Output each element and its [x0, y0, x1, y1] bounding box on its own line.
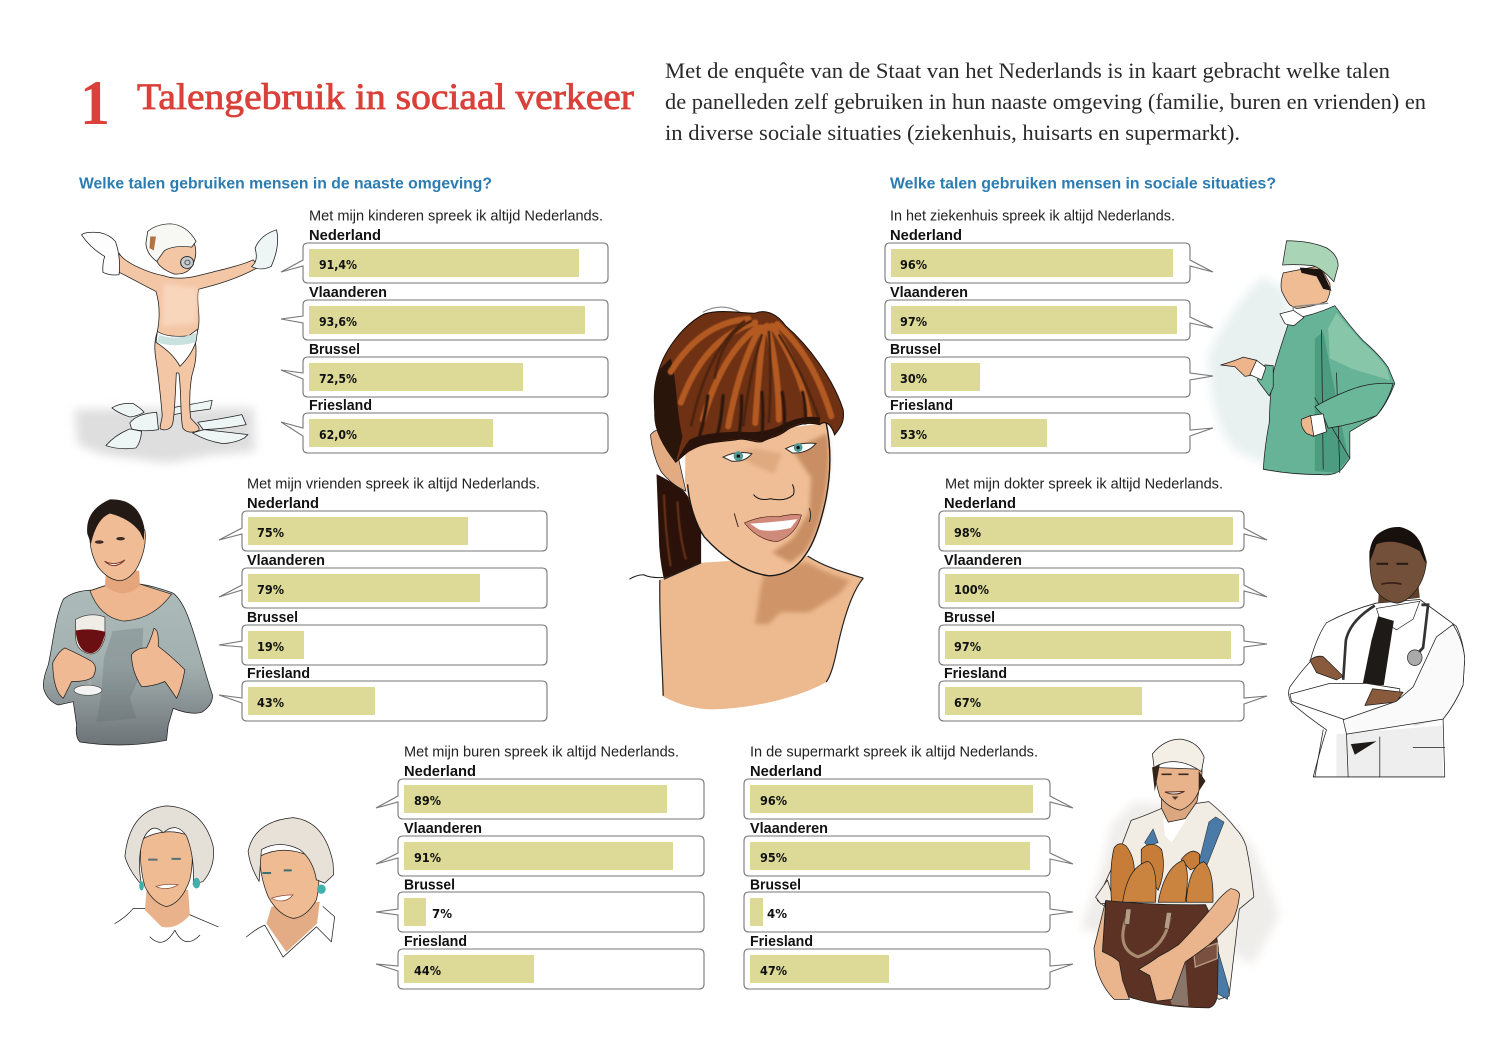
illustration: young woman with wine glass: [43, 499, 213, 745]
row: Nederland 98%: [939, 496, 1267, 551]
sentence: In de supermarkt spreek ik altijd Nederlands.: [750, 744, 1038, 760]
row: Brussel 97%: [939, 610, 1267, 665]
neighbour right: [246, 818, 335, 957]
row: Brussel 4%: 4%: [767, 907, 787, 921]
row: Friesland 43%: Friesland: [247, 666, 310, 682]
row: Friesland 53%: 53%: [900, 428, 927, 442]
row: Friesland 43%: 43%: [257, 696, 284, 710]
intro text: Met de enquête van de Staat van het Nederlands is in kaart gebracht welke talen: [665, 58, 1390, 83]
row: Nederland 75%: [219, 496, 547, 551]
row: Nederland 91,4%: 91,4%: [319, 258, 357, 272]
illustration: surgeon: [1208, 241, 1395, 475]
row: Brussel 4%: [744, 878, 1073, 932]
sentence: Met mijn kinderen spreek ik altijd Nederlands.: [309, 208, 603, 224]
row: Friesland 62,0%: 62,0%: [319, 428, 357, 442]
row: Brussel 97%: 97%: [954, 640, 981, 654]
row: Vlaanderen 100%: [939, 553, 1267, 608]
panel: ziekenhuis: [885, 208, 1213, 453]
illustration: doctor: [1289, 527, 1465, 777]
sentence: Met mijn buren spreek ik altijd Nederlands.: [404, 744, 679, 760]
row: Brussel 72,5%: [281, 342, 608, 397]
row: Vlaanderen 97%: 97%: [900, 315, 927, 329]
row: Friesland 47%: 47%: [760, 964, 787, 978]
row: Vlaanderen 95%: Vlaanderen: [750, 821, 828, 837]
row: Nederland 89%: [376, 764, 704, 819]
intro text: de panelleden zelf gebruiken in hun naaste omgeving (familie, buren en vrienden) en: [665, 89, 1426, 114]
row: Friesland 53%: [885, 398, 1213, 453]
row: Vlaanderen 97%: [885, 285, 1213, 340]
row: Brussel 7%: Brussel: [404, 878, 455, 894]
row: Friesland 43%: [219, 666, 547, 721]
row: Nederland 96%: [744, 764, 1073, 819]
row: Vlaanderen 95%: [744, 821, 1073, 876]
row: Nederland 96%: Nederland: [750, 764, 822, 780]
row: Nederland 91,4%: [281, 228, 608, 283]
row: Friesland 62,0%: [281, 398, 608, 453]
row: Vlaanderen 79%: [219, 553, 547, 608]
row: Friesland 44%: Friesland: [404, 934, 467, 950]
row: Friesland 67%: 67%: [954, 696, 981, 710]
sentence: In het ziekenhuis spreek ik altijd Nederlands.: [890, 208, 1175, 224]
row: Brussel 7%: 7%: [432, 907, 452, 921]
row: Vlaanderen 91%: Vlaanderen: [404, 821, 482, 837]
row: Nederland 98%: Nederland: [944, 496, 1016, 512]
section number: 1: [80, 67, 110, 138]
row: Nederland 96%: Nederland: [890, 228, 962, 244]
panel: vrienden: [219, 476, 547, 721]
row: Brussel 7%: [376, 878, 704, 932]
illustration: baker with bag of bread: [1080, 739, 1280, 1008]
sentence: Met mijn vrienden spreek ik altijd Nederlands.: [247, 476, 540, 492]
row: Friesland 67%: [939, 666, 1267, 721]
row: Brussel 19%: Brussel: [247, 610, 298, 626]
row: Vlaanderen 93,6%: Vlaanderen: [309, 285, 387, 301]
intro text: in diverse sociale situaties (ziekenhuis, huisarts en supermarkt).: [665, 120, 1240, 145]
row: Brussel 19%: [219, 610, 547, 665]
intro text: [665, 58, 1426, 145]
subheading: sociale situaties: Welke talen gebruiken mensen in sociale situaties?: [890, 176, 1276, 192]
heading: Talengebruik in sociaal verkeer: [137, 77, 634, 118]
row: Friesland 44%: 44%: [414, 964, 441, 978]
row: Nederland 89%: Nederland: [404, 764, 476, 780]
title: [80, 67, 634, 138]
row: Nederland 98%: 98%: [954, 526, 981, 540]
row: Nederland 91,4%: Nederland: [309, 228, 381, 244]
row: Nederland 96%: [885, 228, 1213, 283]
panel: buren: [376, 744, 704, 989]
row: Nederland 75%: Nederland: [247, 496, 319, 512]
row: Nederland 96%: 96%: [760, 794, 787, 808]
row: Brussel 30%: Brussel: [890, 342, 941, 358]
row: Nederland 75%: 75%: [257, 526, 284, 540]
panel: supermarkt: [744, 744, 1073, 989]
row: Vlaanderen 91%: [376, 821, 704, 876]
row: Friesland 53%: Friesland: [890, 398, 953, 414]
row: Brussel 30%: 30%: [900, 372, 927, 386]
illustration: central woman: [629, 307, 863, 709]
row: Brussel 72,5%: Brussel: [309, 342, 360, 358]
row: Friesland 62,0%: Friesland: [309, 398, 372, 414]
row: Vlaanderen 91%: 91%: [414, 851, 441, 865]
row: Brussel 97%: Brussel: [944, 610, 995, 626]
row: Friesland 67%: Friesland: [944, 666, 1007, 682]
row: Vlaanderen 97%: Vlaanderen: [890, 285, 968, 301]
panel: dokter: [939, 476, 1267, 721]
row: Nederland 96%: 96%: [900, 258, 927, 272]
row: Brussel 19%: 19%: [257, 640, 284, 654]
row: Brussel 72,5%: 72,5%: [319, 372, 357, 386]
row: Vlaanderen 95%: 95%: [760, 851, 787, 865]
row: Vlaanderen 93,6%: 93,6%: [319, 315, 357, 329]
row: Vlaanderen 93,6%: [281, 285, 608, 340]
row: Vlaanderen 79%: Vlaanderen: [247, 553, 325, 569]
row: Vlaanderen 100%: 100%: [954, 583, 989, 597]
sentence: Met mijn dokter spreek ik altijd Nederlands.: [945, 476, 1223, 492]
row: Nederland 89%: 89%: [414, 794, 441, 808]
illustration: two elderly neighbours: [115, 806, 335, 957]
illustration: baby with diapers: [74, 224, 278, 463]
panel: kinderen: [281, 208, 608, 453]
row: Vlaanderen 100%: Vlaanderen: [944, 553, 1022, 569]
row: Brussel 30%: [885, 342, 1213, 397]
row: Friesland 47%: [744, 934, 1073, 989]
row: Friesland 44%: [376, 934, 704, 989]
row: Vlaanderen 79%: 79%: [257, 583, 284, 597]
row: Friesland 47%: Friesland: [750, 934, 813, 950]
neighbour left: [115, 806, 218, 942]
row: Brussel 4%: Brussel: [750, 878, 801, 894]
subheading: naaste omgeving: Welke talen gebruiken mensen in de naaste omgeving?: [79, 176, 492, 192]
